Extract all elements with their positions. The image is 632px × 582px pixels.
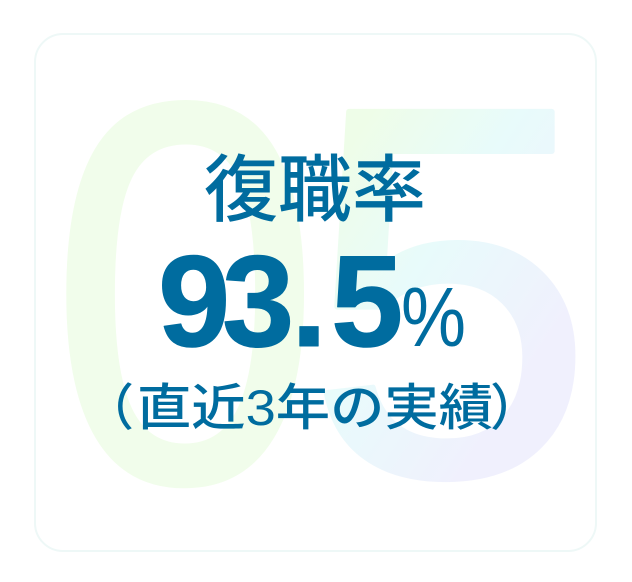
panel: card (35, 34, 596, 551)
percent sign: % (401, 270, 466, 364)
note: 直近3年の実績 (137, 380, 493, 436)
heading: 復職率 (204, 150, 426, 231)
note: （ (84, 380, 134, 436)
number: 93.5 (158, 228, 403, 374)
background numeral 5: 5 (306, 0, 594, 582)
figure: 93.5 percent (158, 228, 466, 374)
note: ） (490, 380, 540, 436)
